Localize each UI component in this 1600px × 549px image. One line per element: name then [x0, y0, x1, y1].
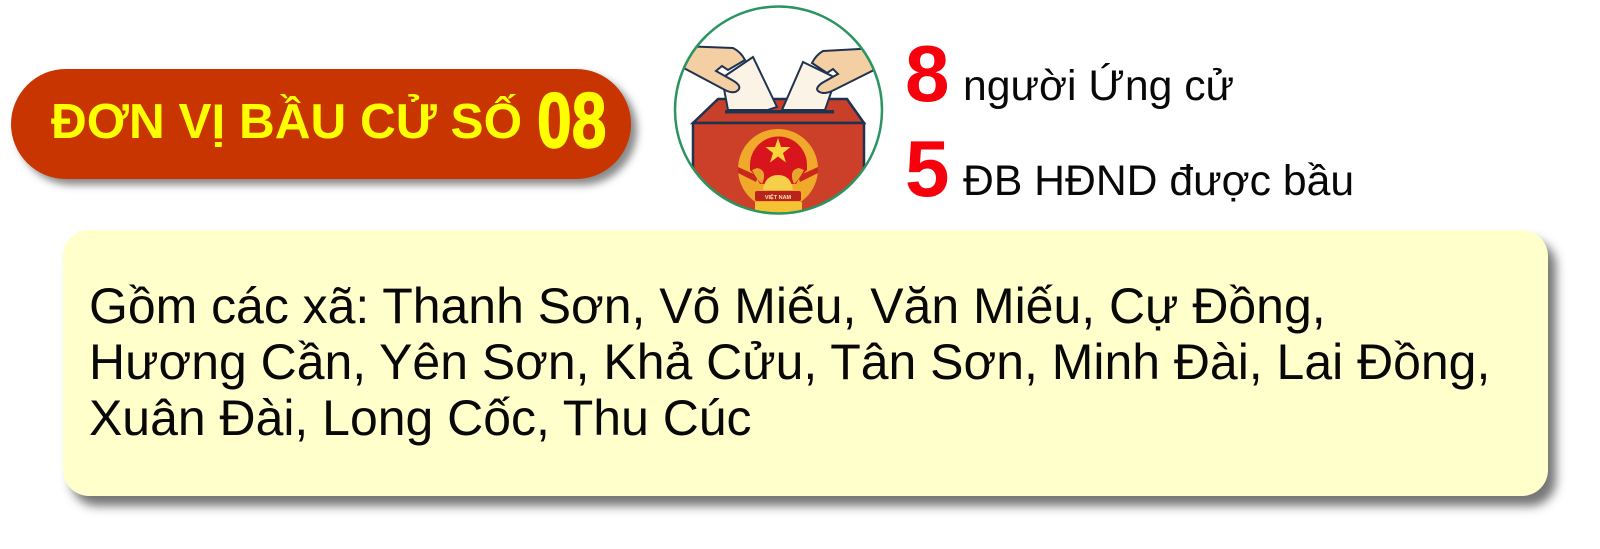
label: ĐB HĐND được bầu [963, 157, 1354, 205]
communes text: Hương Cần, Yên Sơn, Khả Cửu, Tân Sơn, Minh Đài, Lai Đồng, [89, 334, 1490, 390]
pill title: ĐƠN VỊ BẦU CỬ SỐ [51, 94, 522, 149]
box top [693, 99, 864, 123]
slot [725, 110, 834, 114]
emblem [738, 129, 818, 214]
box front [693, 123, 864, 218]
right ballot [782, 62, 836, 110]
emblem: VIỆT NAM [765, 193, 792, 201]
communes text [89, 278, 1490, 446]
stat: delegates [905, 124, 1354, 213]
icon: ballot box [674, 5, 884, 215]
left ballot [722, 57, 777, 110]
stat: candidates [905, 29, 1234, 118]
number 5: 5 [905, 124, 950, 213]
label: người Ứng cử [963, 62, 1234, 110]
number 8: 8 [905, 29, 950, 118]
header pill [11, 69, 631, 179]
pill number: 08 [537, 76, 606, 164]
right hand [812, 48, 878, 93]
communes text: Gồm các xã: Thanh Sơn, Võ Miếu, Văn Miếu, Cự Đồng, [89, 278, 1326, 334]
panel: communes [63, 230, 1548, 496]
communes text: Xuân Đài, Long Cốc, Thu Cúc [89, 390, 752, 446]
left hand [680, 46, 745, 92]
